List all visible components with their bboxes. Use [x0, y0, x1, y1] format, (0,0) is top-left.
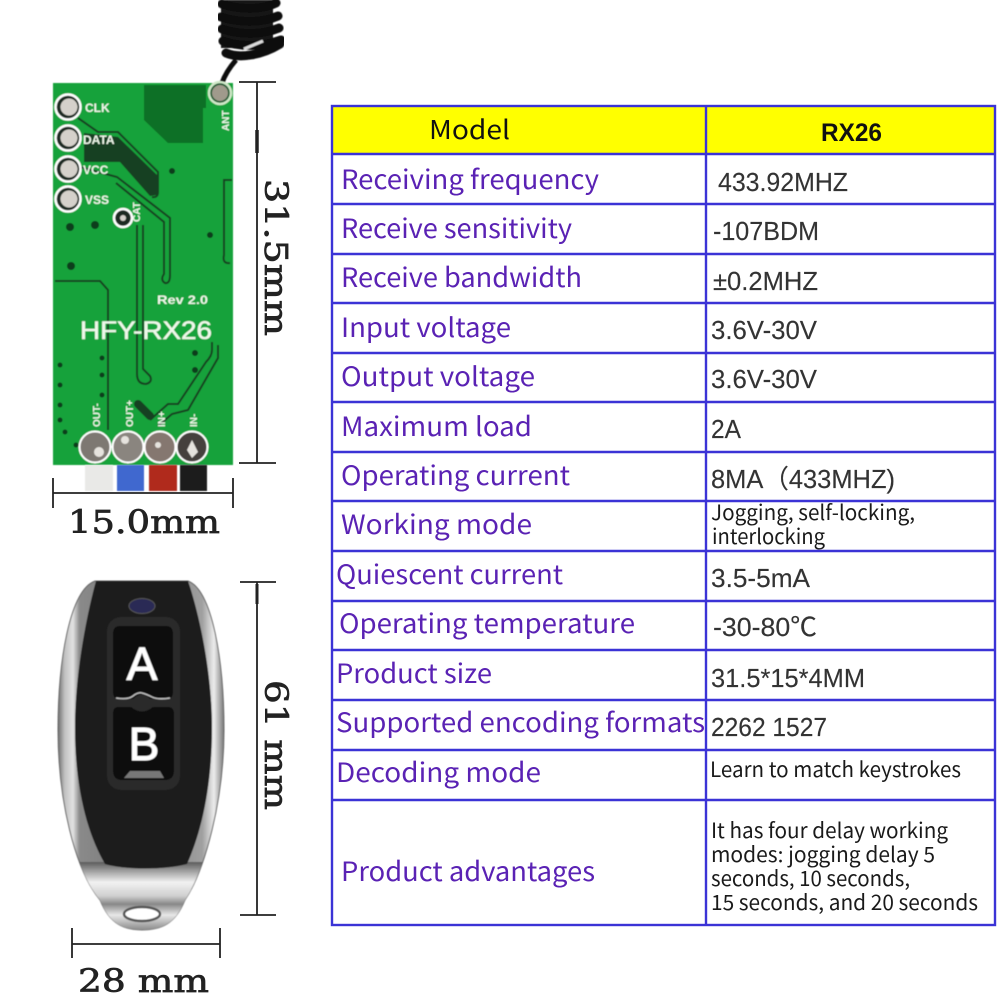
small text values: modes: jogging delay 5 — [711, 839, 935, 869]
silkscreen labels: OUT- — [92, 403, 103, 427]
LED indicator — [129, 598, 155, 614]
row values: 8MA（433MHZ) — [711, 464, 895, 494]
silkscreen labels: IN- — [189, 414, 200, 427]
small text values: Jogging, self-locking, — [711, 497, 915, 527]
icon: key fob remote control — [58, 581, 224, 930]
row values: 3.6V-30V — [711, 315, 818, 345]
row labels: Receive bandwidth — [341, 256, 582, 295]
bottom pads — [80, 432, 208, 462]
dimension: board height — [239, 82, 295, 463]
header: Model: Model — [429, 110, 510, 147]
row values — [711, 167, 895, 742]
row values: 3.5-5mA — [711, 563, 811, 593]
silkscreen labels: ANT — [221, 110, 232, 131]
dimension: remote width — [72, 928, 220, 1000]
small text values: Learn to match keystrokes — [710, 754, 961, 784]
small text values: 15 seconds, and 20 seconds — [711, 887, 978, 917]
board via holes — [58, 168, 213, 448]
row labels: Operating temperature — [339, 602, 635, 641]
button B — [113, 707, 174, 780]
header: RX26: RX26 — [821, 119, 882, 147]
silkscreen labels: CLK — [85, 101, 110, 115]
silkscreen labels — [80, 101, 232, 427]
icon: coiled antenna wire — [221, 0, 281, 83]
silkscreen labels: VCC — [83, 163, 109, 177]
row labels: Decoding mode — [336, 751, 541, 790]
icon: four output wires — [85, 465, 207, 491]
board traces — [55, 118, 232, 430]
row values: 31.5*15*4MM — [711, 663, 865, 693]
row labels: Working mode — [341, 503, 532, 542]
row values: 433.92MHZ — [718, 167, 848, 197]
row labels: Quiescent current — [336, 553, 563, 592]
silkscreen labels: OUT+ — [125, 400, 136, 427]
silkscreen labels: Rev 2.0 — [157, 293, 208, 307]
antenna copper cutout — [144, 85, 206, 143]
dimension: remote width: 28 mm — [78, 962, 209, 1000]
small text values — [710, 497, 978, 917]
table grid — [332, 106, 995, 925]
button surround — [107, 617, 180, 790]
small text values: interlocking — [712, 521, 825, 551]
dimension: board width — [53, 478, 233, 541]
silkscreen labels: CAT — [132, 202, 143, 222]
dimension: remote height — [240, 582, 295, 915]
silkscreen labels: VSS — [85, 193, 109, 207]
row labels: Input voltage — [341, 306, 511, 345]
row labels: Product advantages — [341, 850, 595, 889]
row values: 2262 1527 — [711, 712, 827, 742]
row labels: Supported encoding formats — [336, 701, 705, 740]
silkscreen labels: IN+ — [157, 411, 168, 427]
row values: -30-80℃ — [713, 612, 817, 642]
row labels: Operating current — [341, 454, 570, 493]
small text values: It has four delay working — [711, 815, 948, 845]
row values: 3.6V-30V — [711, 364, 818, 394]
row labels: Output voltage — [341, 355, 535, 394]
button A: A — [127, 638, 158, 690]
left pads — [56, 82, 231, 227]
dimension: remote height: 61 mm — [257, 680, 295, 810]
button B: B — [129, 718, 159, 770]
keyring hole — [124, 907, 160, 921]
row values: -107BDM — [713, 216, 819, 246]
silkscreen labels: DATA — [83, 133, 115, 147]
row labels — [336, 158, 705, 889]
small text values: seconds, 10 seconds, — [711, 863, 910, 893]
table: product specifications — [332, 106, 995, 925]
table header background — [333, 107, 995, 154]
row values: ±0.2MHZ — [713, 266, 818, 296]
dimension: board width: 15.0mm — [68, 503, 220, 541]
dimension: board height: 31.5mm — [257, 179, 295, 336]
row labels: Receive sensitivity — [341, 207, 572, 246]
button A — [113, 626, 173, 699]
row labels: Product size — [336, 652, 492, 691]
row labels: Maximum load — [341, 405, 532, 444]
row values: 2A — [711, 414, 742, 444]
silkscreen labels: HFY-RX26 — [80, 317, 212, 345]
row labels: Receiving frequency — [341, 158, 599, 197]
panel: green receiver circuit board — [53, 82, 233, 465]
